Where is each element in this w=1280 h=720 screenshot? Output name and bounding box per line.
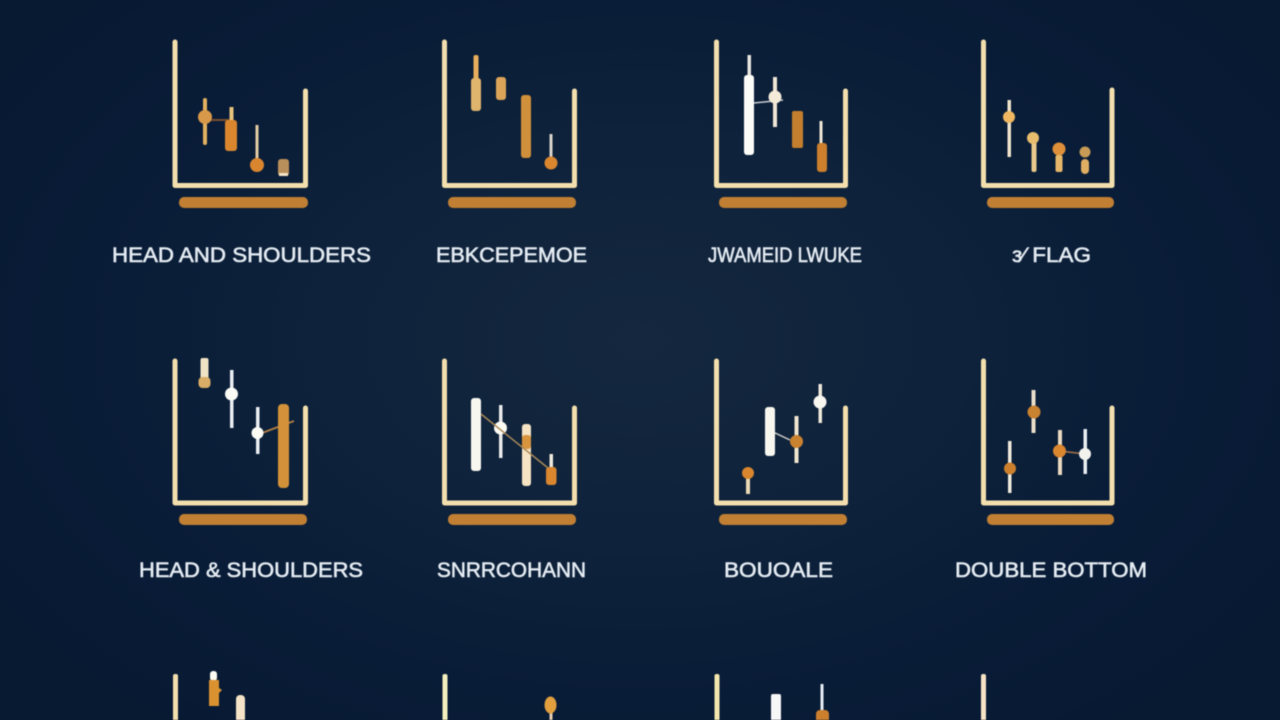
panel: bouoale, row 2 [716,361,847,582]
panel: head and shoulders, row 1 [112,42,371,267]
chart axis [173,674,178,720]
label: SNRRCOHANN [437,559,586,582]
panel: partial chart, row 3 column 4 [981,674,986,720]
chart frame [444,42,574,186]
label: BOUOALE [724,559,833,582]
panel: ebkcepemoe, row 1 [436,42,587,267]
candlesticks [198,358,294,488]
candlesticks [209,671,245,720]
label: HEAD & SHOULDERS [139,559,363,582]
label: JWAMEID LWUKE [708,244,862,267]
chart frame [716,361,846,503]
candlesticks [544,696,556,720]
panel: partial chart, row 3 column 3 [714,674,829,720]
underline bar [179,197,308,208]
label: DOUBLE BOTTOM [955,559,1147,582]
candlesticks [742,384,826,494]
candlesticks [1004,390,1091,493]
candlesticks [744,55,827,172]
panel: partial chart, row 3 column 2 [442,674,556,720]
underline bar [448,514,576,525]
candlesticks [471,398,556,486]
chart frame [716,42,846,186]
chart frame [984,361,1112,503]
underline bar [179,514,307,525]
candlesticks [771,684,829,720]
underline bar [719,514,847,525]
underline bar [448,197,576,208]
label: EBKCEPEMOE [436,244,587,267]
chart frame [444,361,574,503]
chart axis [981,674,986,720]
panel: double bottom, row 2 [955,361,1147,582]
underline bar [987,514,1114,525]
candlesticks [1003,100,1090,174]
underline bar [987,197,1114,208]
panel: snrrcohann, row 2 [437,361,586,582]
chart frame [175,361,306,503]
panel: head and shoulders, row 2 [139,358,363,582]
candlesticks [198,98,289,176]
label: HEAD AND SHOULDERS [112,244,371,267]
chart axis [714,674,720,720]
chart frame [984,42,1112,186]
chart frame [175,42,306,186]
candlesticks [471,55,558,170]
underline bar [719,197,847,208]
label: з⁄ FLAG [1012,244,1091,267]
panel: jwameid lwuke, row 1 [708,42,862,267]
chart axis [442,674,448,720]
panel: flag, row 1 [984,42,1114,267]
panel: partial chart, row 3 column 1 [173,671,245,720]
